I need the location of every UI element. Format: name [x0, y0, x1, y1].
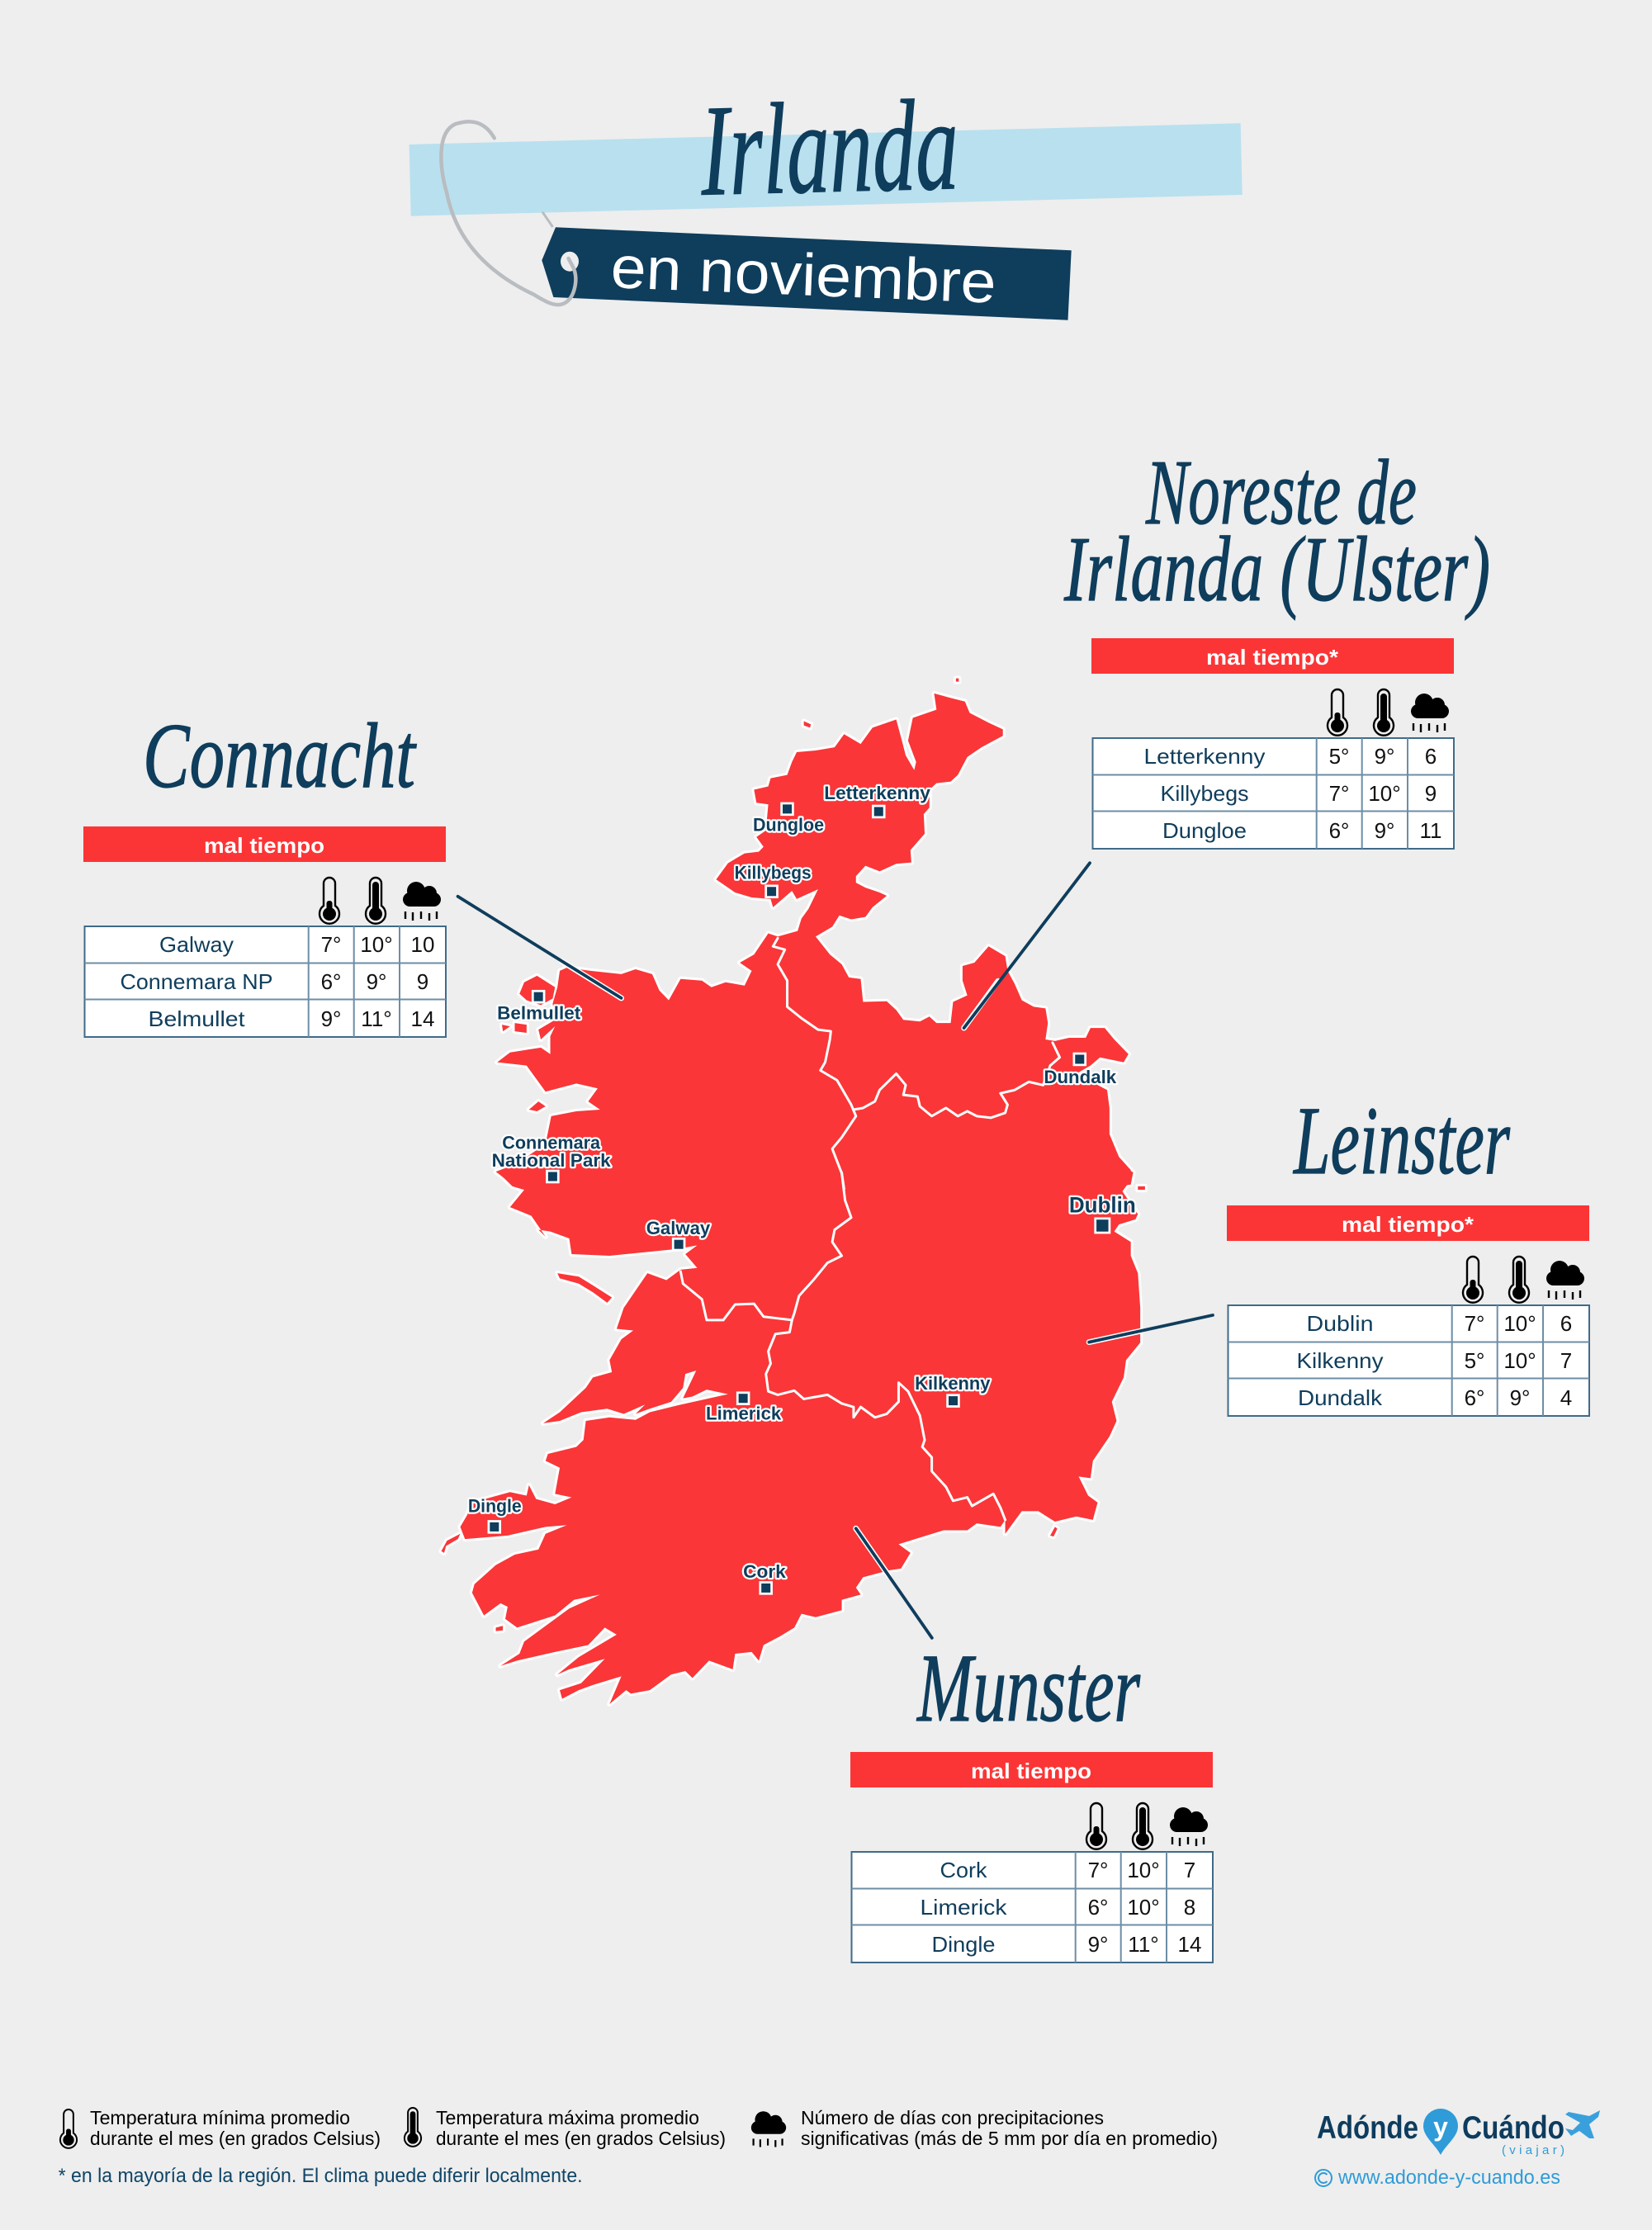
climate table: Letterkenny	[1144, 744, 1265, 769]
icon: rain cloud	[403, 882, 441, 921]
heading: Leinster: Leinster	[1293, 1087, 1511, 1195]
climate table: 10°	[1127, 1895, 1160, 1920]
climate table: Galway	[159, 932, 234, 957]
legend item: maximum temperature: Temperatura máxima promedio	[436, 2107, 699, 2128]
logo word: Adónde: Adónde	[1317, 2110, 1418, 2146]
logo: Adónde y Cuándo	[1315, 2109, 1600, 2189]
heading: Irlanda (Ulster): Irlanda (Ulster)	[1063, 518, 1490, 621]
title band	[409, 123, 1243, 216]
logo tagline: (viajar)	[1502, 2143, 1564, 2157]
city: Killybegs	[735, 862, 812, 897]
icon: rain cloud	[1411, 694, 1449, 732]
climate table: 9°	[1088, 1932, 1108, 1957]
legend item: rainy days: Número de días con precipitaciones	[801, 2107, 1104, 2128]
climate table: 9°	[1375, 744, 1394, 769]
climate table: 10°	[1368, 781, 1401, 806]
city: Connemara National Park: National Park	[492, 1150, 611, 1171]
icon: copyright	[1315, 2170, 1332, 2186]
climate table	[1093, 738, 1454, 849]
city: Letterkenny	[824, 783, 930, 817]
city: Killybegs: Killybegs	[735, 862, 812, 883]
climate table: 6	[1560, 1311, 1572, 1336]
climate table	[1228, 1305, 1589, 1416]
panel: Munster	[850, 1634, 1213, 1962]
climate table: 7	[1560, 1348, 1572, 1373]
band: mal tiempo: mal tiempo	[204, 833, 324, 858]
climate table: Limerick	[920, 1895, 1008, 1920]
climate table: 11°	[361, 1006, 392, 1031]
climate table: Dungloe	[1162, 818, 1247, 843]
subtitle: en noviembre: en noviembre	[609, 234, 997, 316]
panel: Leinster	[1227, 1087, 1589, 1416]
city: Kilkenny	[915, 1373, 991, 1407]
city: Galway	[646, 1218, 711, 1250]
climate table: Kilkenny	[1296, 1348, 1384, 1373]
climate table: 5°	[1465, 1348, 1484, 1373]
region borders north	[773, 938, 1060, 1189]
legend item: rainy days	[751, 2107, 1218, 2149]
icon: min thermometer	[1086, 1803, 1106, 1849]
icon: max thermometer	[1133, 1803, 1153, 1849]
city: Cork: Cork	[743, 1561, 786, 1582]
climate table: Connemara NP	[121, 969, 272, 994]
icon: max thermometer	[366, 878, 386, 924]
climate table: 9°	[1375, 818, 1394, 843]
climate table: 9°	[367, 969, 386, 994]
tag string	[441, 121, 575, 305]
legend item: minimum temperature: Temperatura mínima promedio	[90, 2107, 350, 2128]
logo letter y: y	[1433, 2112, 1448, 2142]
city: Dundalk: Dundalk	[1044, 1067, 1117, 1087]
climate table: 10°	[1127, 1858, 1160, 1882]
climate table: 9°	[1510, 1385, 1530, 1410]
legend item: minimum temperature	[60, 2107, 381, 2149]
climate table: Belmullet	[149, 1006, 245, 1031]
city: Limerick: Limerick	[706, 1404, 782, 1424]
climate table: 6°	[1088, 1895, 1108, 1920]
climate table: 14	[1178, 1932, 1201, 1957]
icon: min thermometer	[320, 878, 339, 924]
climate table: 6°	[321, 969, 341, 994]
icon: rain cloud	[1170, 1807, 1208, 1846]
city: Dublin	[1069, 1192, 1136, 1233]
heading: Munster: Munster	[916, 1634, 1141, 1742]
panel: Noreste de Irlanda (Ulster)	[1063, 442, 1490, 849]
city: Connemara National Park	[492, 1132, 611, 1182]
band: mal tiempo: mal tiempo*	[1342, 1212, 1474, 1237]
legend item: minimum temperature: durante el mes (en grados Celsius)	[90, 2128, 381, 2149]
climate table: Killybegs	[1161, 781, 1248, 806]
callout line: Leinster	[1089, 1315, 1213, 1342]
icon: max thermometer	[1509, 1257, 1529, 1303]
logo word: Cuándo: Cuándo	[1462, 2110, 1564, 2146]
legend item: rainy days: significativas (más de 5 mm por día en promedio)	[801, 2128, 1218, 2149]
map of Ireland	[442, 679, 1213, 1704]
icon: min thermometer	[1463, 1257, 1483, 1303]
website url: www.adonde-y-cuando.es	[1337, 2166, 1560, 2189]
climate table: 9°	[321, 1006, 341, 1031]
band: mal tiempo	[850, 1752, 1213, 1787]
climate table: Dublin	[1306, 1311, 1374, 1336]
city: Dingle	[468, 1496, 522, 1532]
climate table: 9	[417, 969, 428, 994]
city: Dingle: Dingle	[468, 1496, 522, 1517]
legend item: maximum temperature	[405, 2107, 726, 2149]
logo pin	[1423, 2109, 1458, 2155]
land mass	[442, 679, 1145, 1704]
climate table: 7°	[1329, 781, 1349, 806]
city: Limerick	[706, 1393, 782, 1424]
band: mal tiempo	[83, 826, 446, 862]
title: Irlanda: Irlanda	[698, 73, 960, 224]
climate table: 10	[411, 932, 434, 957]
icon: max thermometer	[1374, 689, 1394, 736]
band: mal tiempo	[1227, 1205, 1589, 1241]
climate table: 14	[411, 1006, 434, 1031]
legend	[59, 2107, 1218, 2187]
city: Galway: Galway	[646, 1218, 711, 1238]
city: Letterkenny: Letterkenny	[824, 783, 930, 803]
icon: rain cloud	[1546, 1261, 1584, 1300]
city: Kilkenny: Kilkenny	[915, 1373, 991, 1394]
climate table: 10°	[360, 932, 393, 957]
callout line: Connacht	[458, 897, 622, 998]
climate table: Dingle	[931, 1932, 996, 1957]
tag string short	[542, 212, 553, 227]
climate table: 7°	[321, 932, 341, 957]
heading: Noreste de: Noreste de	[1145, 442, 1417, 544]
climate table: 8	[1184, 1895, 1195, 1920]
climate table: 7°	[1465, 1311, 1484, 1336]
panel: Connacht	[83, 705, 446, 1037]
legend item: maximum temperature: durante el mes (en grados Celsius)	[436, 2128, 726, 2149]
callout line: Munster	[856, 1528, 932, 1638]
callout line: Ulster	[964, 863, 1090, 1028]
city: Cork	[743, 1561, 786, 1593]
region borders south	[680, 1172, 1006, 1520]
climate table: 11	[1420, 818, 1441, 843]
band: mal tiempo: mal tiempo	[971, 1759, 1091, 1783]
icon: plane	[1565, 2110, 1600, 2138]
tag hole	[561, 252, 579, 272]
band: mal tiempo	[1091, 638, 1454, 674]
climate table: 10°	[1503, 1311, 1536, 1336]
city: Dublin: Dublin	[1069, 1192, 1136, 1217]
climate table	[852, 1852, 1213, 1962]
climate table: Dundalk	[1298, 1385, 1383, 1410]
title block	[409, 73, 1243, 320]
climate table: 9	[1425, 781, 1437, 806]
city: Connemara National Park: Connemara	[502, 1132, 601, 1153]
climate table: 6°	[1465, 1385, 1484, 1410]
climate table: 7	[1184, 1858, 1195, 1882]
climate table: 6	[1425, 744, 1437, 769]
city: Belmullet: Belmullet	[497, 1003, 581, 1024]
climate table: Cork	[940, 1858, 988, 1882]
heading: Connacht: Connacht	[143, 705, 417, 807]
subtitle tag	[542, 227, 1072, 320]
footnote: * en la mayoría de la región. El clima puede diferir localmente.	[59, 2165, 583, 2187]
city: Dungloe: Dungloe	[753, 815, 824, 836]
climate table: 11°	[1128, 1932, 1159, 1957]
climate table: 4	[1560, 1385, 1572, 1410]
climate table: 7°	[1088, 1858, 1108, 1882]
climate table: 6°	[1329, 818, 1349, 843]
city: Dungloe	[753, 803, 824, 836]
icon: min thermometer	[1328, 689, 1347, 736]
climate table: 10°	[1503, 1348, 1536, 1373]
city: Belmullet	[497, 991, 581, 1024]
climate table: 5°	[1329, 744, 1349, 769]
climate table	[84, 926, 446, 1037]
city: Dundalk	[1044, 1053, 1117, 1087]
coast halo	[442, 679, 1145, 1704]
band: mal tiempo: mal tiempo*	[1206, 645, 1339, 670]
